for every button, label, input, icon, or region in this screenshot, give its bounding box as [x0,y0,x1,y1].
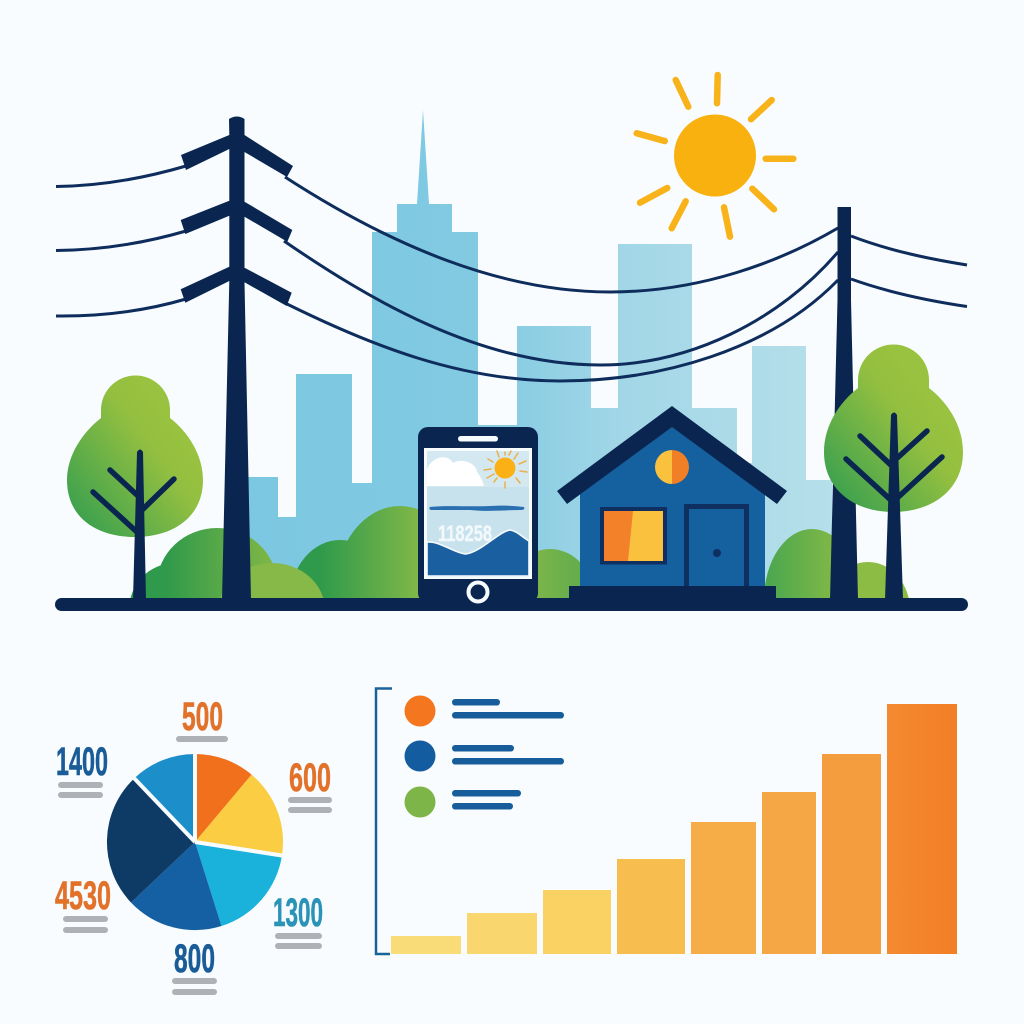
left tree [67,376,203,600]
smartphone [418,427,538,603]
legend row: orange [404,696,564,726]
screen number: 118258 [438,521,492,546]
ground line [55,598,968,611]
roof [557,406,787,504]
pie label: 1300 [273,891,323,949]
pie label: 500 [176,695,228,742]
pie label: 1300: 1300 [273,891,323,935]
pie label: 800 [172,937,217,995]
pie label: 600: 600 [289,756,331,800]
pie label: 1400: 1400 [56,740,108,784]
house base [569,586,776,600]
screen sun [484,451,527,488]
bushes [130,506,909,598]
chart bracket axis [376,688,392,954]
power lines [56,166,967,381]
right utility pole [830,207,858,600]
legend [404,696,564,818]
bar chart [391,704,957,954]
house door [684,504,749,588]
pie label: 800: 800 [174,937,215,981]
screen cloud [427,457,484,486]
house window [600,507,667,564]
pie label: 1400 [56,740,108,798]
phone speaker [458,436,498,442]
screen mountains [427,530,529,576]
phone screen [424,448,532,579]
right tree [824,344,963,600]
attic round window [655,450,689,484]
legend row: blue [404,740,564,772]
phone home button [468,582,488,602]
left utility pole [181,116,293,600]
pie label: 4530 [55,874,111,933]
pie chart [107,750,285,930]
house [557,406,787,600]
legend row: green [404,786,521,818]
pie label: 4530: 4530 [55,874,111,918]
pie label: 500: 500 [182,695,223,739]
screen wave [429,506,524,511]
sun [637,75,793,237]
pie label: 600 [288,756,332,813]
city skyline [248,110,832,600]
